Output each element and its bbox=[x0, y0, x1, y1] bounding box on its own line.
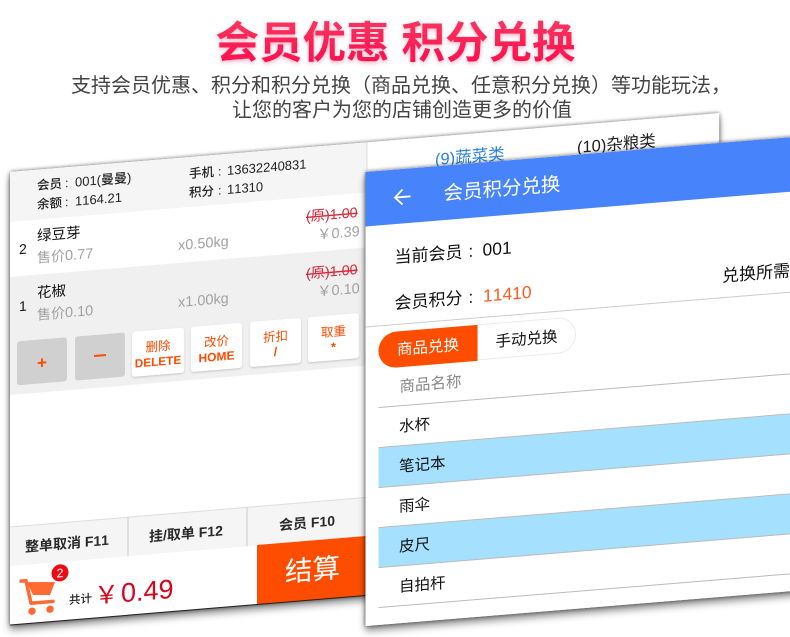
member info: : bbox=[468, 242, 473, 261]
cart count badge: 2 bbox=[57, 566, 64, 581]
plus button bbox=[17, 337, 67, 385]
product table: 水杯 bbox=[399, 415, 430, 436]
delete button bbox=[132, 328, 184, 377]
order row: 花椒 with action buttons: 售价0.10 bbox=[37, 302, 93, 324]
change price button bbox=[191, 323, 242, 372]
member info: 001 bbox=[482, 238, 512, 260]
plus button: + bbox=[37, 353, 47, 373]
member header band: : bbox=[218, 164, 221, 179]
category tabs bbox=[435, 131, 656, 169]
member header band: 会员 bbox=[37, 177, 62, 193]
subtitle text: 让您的客户为您的店铺创造更多的价值 bbox=[232, 98, 572, 122]
member header band: 余额 bbox=[37, 196, 62, 212]
subtitle text: 支持会员优惠、积分和积分兑换（商品兑换、任意积分兑换）等功能玩法， bbox=[71, 74, 731, 97]
product table: 商品名称 bbox=[400, 373, 461, 396]
icon: back arrow bbox=[395, 189, 410, 205]
screen header bbox=[366, 136, 790, 226]
member header band: 积分 bbox=[189, 184, 214, 200]
function key bar: 会员 F10 bbox=[279, 513, 335, 533]
panel: POS cashier screen bbox=[10, 113, 719, 625]
order row: 绿豆芽: 售价0.77 bbox=[37, 245, 93, 267]
tab switch: 商品兑换 bbox=[397, 336, 459, 359]
icon: shopping cart bbox=[21, 578, 55, 616]
member header band: 001(曼曼) bbox=[75, 170, 131, 190]
member info: 当前会员 bbox=[394, 243, 462, 267]
member header band: 13632240831 bbox=[227, 156, 307, 178]
round off button: 取重 bbox=[321, 323, 346, 340]
order row: 绿豆芽: x0.50kg bbox=[178, 234, 229, 254]
total label: 共计 bbox=[69, 591, 92, 607]
checkout button bbox=[257, 536, 369, 605]
member info: : bbox=[468, 288, 473, 307]
minus button bbox=[75, 332, 125, 381]
order row: 绿豆芽: 2 bbox=[19, 241, 27, 257]
product table: 笔记本 bbox=[399, 454, 445, 476]
discount button: / bbox=[274, 345, 278, 359]
checkout bar bbox=[21, 536, 369, 625]
product table: 自拍杆 bbox=[399, 574, 445, 596]
cart count badge bbox=[52, 564, 68, 582]
order row: 花椒 with action buttons: (原)1.00 bbox=[306, 262, 358, 282]
member header band: 11310 bbox=[227, 179, 263, 197]
category tabs: (10)杂粮类 bbox=[577, 131, 656, 157]
order row: 绿豆芽: 绿豆芽 bbox=[37, 224, 80, 245]
subtitle text bbox=[71, 74, 731, 122]
change price button: HOME bbox=[198, 348, 235, 365]
tab switch bbox=[378, 317, 576, 369]
member info bbox=[394, 215, 790, 313]
order row: 花椒 with action buttons: 1 bbox=[19, 298, 27, 314]
total amount: 0.49 bbox=[121, 574, 174, 608]
member info: 会员积分 bbox=[394, 289, 462, 313]
checkout button: 结算 bbox=[285, 552, 340, 588]
total amount: ￥ bbox=[94, 580, 119, 611]
member header band: : bbox=[65, 195, 68, 209]
product table: 雨伞 bbox=[399, 495, 430, 516]
order row: 绿豆芽: ￥0.39 bbox=[317, 224, 360, 244]
category tabs: (9)蔬菜类 bbox=[435, 144, 505, 169]
delete button: 删除 bbox=[146, 339, 171, 355]
round off button: * bbox=[331, 340, 336, 354]
product table: 皮尺 bbox=[399, 535, 430, 556]
panel: member points redemption screen bbox=[366, 136, 790, 626]
member header band: : bbox=[65, 176, 68, 190]
order row: 花椒 with action buttons: 花椒 bbox=[37, 282, 66, 302]
order row: 绿豆芽: (原)1.00 bbox=[306, 205, 358, 225]
discount button bbox=[250, 318, 301, 367]
function key bar: 整单取消 F11 bbox=[25, 532, 109, 555]
function key bar: 挂/取单 F12 bbox=[149, 522, 223, 544]
change price button: 改价 bbox=[204, 334, 229, 350]
member info: 兑换所需 bbox=[722, 261, 790, 286]
order row: 花椒 with action buttons bbox=[10, 247, 367, 395]
title: 会员优惠 积分兑换 bbox=[215, 20, 576, 68]
order row: 绿豆芽 bbox=[10, 192, 367, 277]
delete button: DELETE bbox=[135, 353, 181, 371]
member header band: 手机 bbox=[189, 165, 214, 181]
function key bar bbox=[10, 497, 367, 566]
member header band bbox=[10, 142, 367, 232]
round off button bbox=[308, 313, 359, 362]
member header band: 1164.21 bbox=[75, 190, 122, 209]
tab switch: 手动兑换 bbox=[496, 328, 558, 351]
screen title: 会员积分兑换 bbox=[444, 174, 560, 205]
member info: 11410 bbox=[483, 282, 532, 306]
product table bbox=[378, 344, 790, 608]
member header band: : bbox=[218, 183, 221, 198]
order row: 花椒 with action buttons: ￥0.10 bbox=[317, 281, 360, 301]
order row: 花椒 with action buttons: x1.00kg bbox=[178, 291, 229, 311]
discount button: 折扣 bbox=[263, 329, 288, 345]
